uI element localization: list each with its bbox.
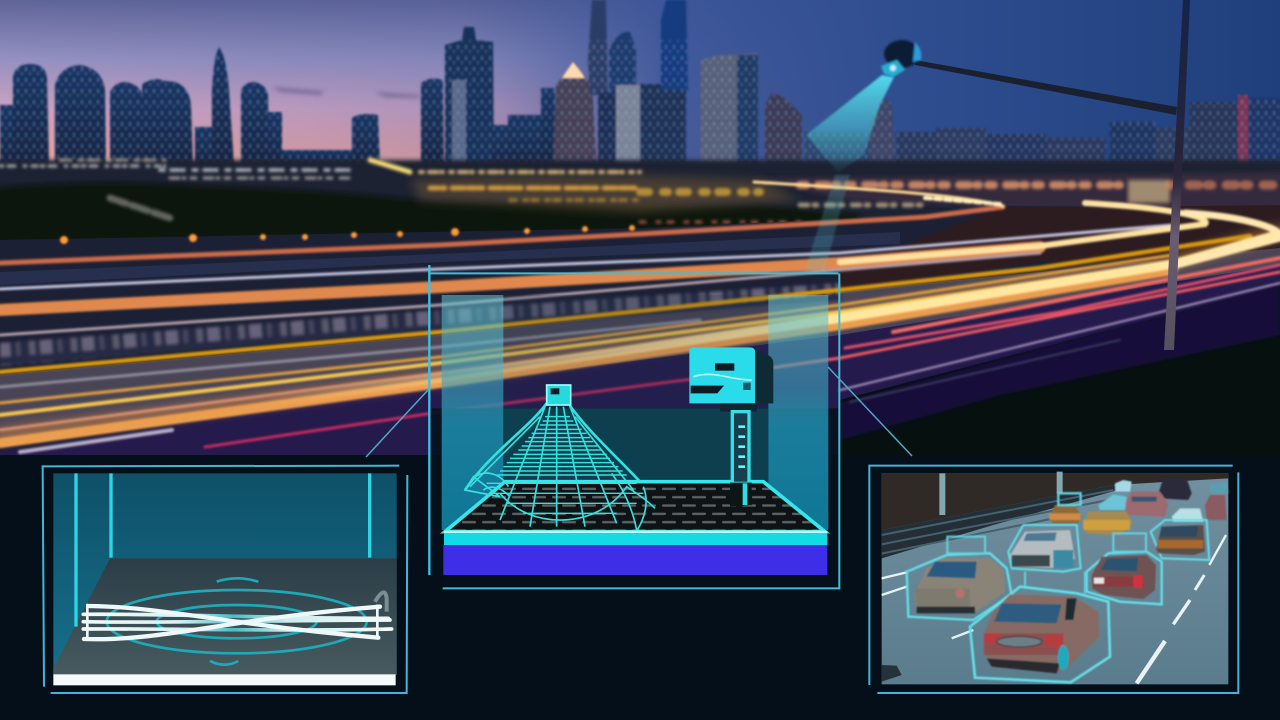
radar ellipses: [107, 578, 367, 665]
white car center: [1008, 525, 1081, 572]
grid floor: [445, 482, 825, 532]
distant cars: [1098, 478, 1228, 522]
city lights and tree band: [0, 160, 1280, 250]
scan beam: [805, 75, 894, 270]
frame lines: [426, 265, 433, 575]
city skyline: [0, 0, 1280, 164]
lamp head: [881, 40, 921, 77]
lamp pole: [1164, 0, 1190, 350]
floor: [53, 558, 397, 675]
road marker lights: [60, 225, 635, 244]
dark-hood right car: [1151, 520, 1209, 560]
highway surface: [0, 205, 1280, 455]
base bar: [444, 532, 827, 545]
street lamp with sensor head: [805, 0, 1190, 350]
lane markings: [882, 535, 1226, 683]
radar cone wireframe: [465, 385, 655, 530]
panel frame: [43, 466, 407, 693]
left panel: radar scan wave: [43, 466, 407, 693]
corner vehicle: [882, 665, 902, 682]
red car right: [1087, 533, 1162, 604]
panel backing: [430, 408, 838, 588]
connector lines: [366, 367, 912, 457]
center panel: roadside sensor module: [429, 265, 839, 588]
road photo background: [882, 473, 1228, 684]
panel frame: [869, 466, 1238, 693]
sensor unit on pole: [689, 347, 773, 507]
light trails: [0, 182, 1280, 452]
purple base: [443, 545, 827, 575]
silver car left: [907, 537, 1012, 620]
sky background: [0, 0, 1280, 175]
white braided waves: [83, 605, 392, 639]
lamp arm: [915, 60, 1177, 115]
back wall: [53, 473, 397, 675]
translucent left column: [442, 295, 503, 530]
orange car: [1083, 512, 1133, 535]
cyan wall lines: [76, 473, 370, 627]
right panel: vehicle detection: [869, 466, 1238, 693]
red car front: [970, 572, 1110, 682]
translucent right column: [768, 295, 828, 530]
yellow car upper: [1048, 493, 1082, 523]
white base bar: [53, 674, 396, 685]
